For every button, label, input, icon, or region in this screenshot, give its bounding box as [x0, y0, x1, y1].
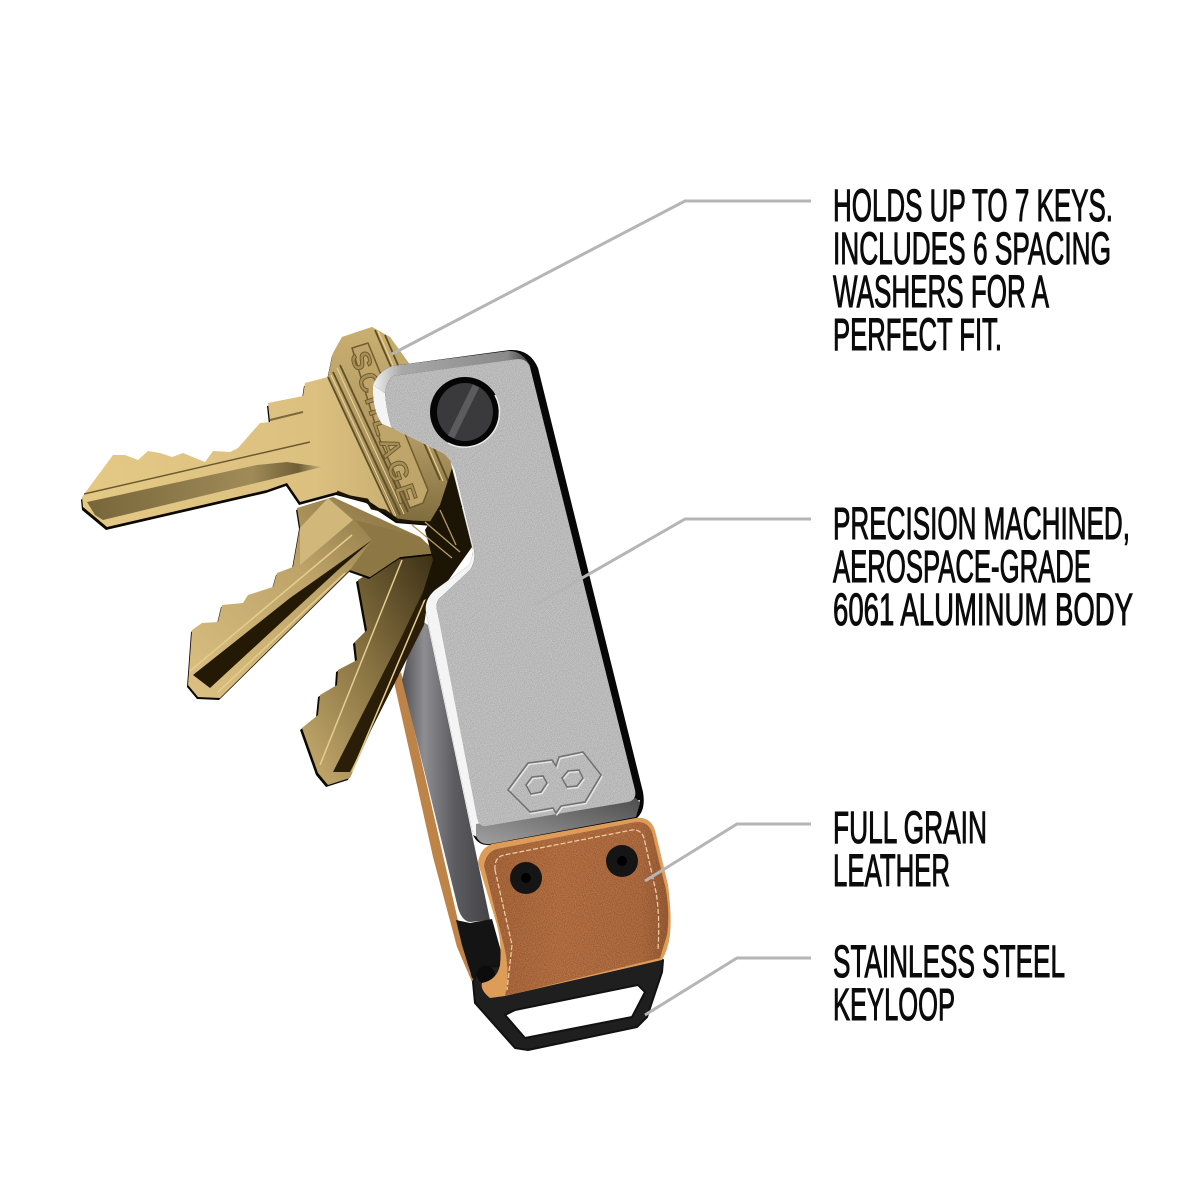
key 3 ridge [320, 560, 431, 772]
leader line: keyloop [645, 958, 811, 1015]
body face [385, 359, 635, 826]
text: holds up to 7 keys: WASHERS FOR A [833, 266, 1049, 317]
key 2 shadow [187, 499, 436, 700]
body black edge [373, 350, 644, 845]
leather stitching [495, 830, 659, 990]
key 2 head shade [350, 520, 437, 577]
key 2 blade [188, 497, 437, 698]
body lower bevel [476, 798, 640, 844]
key 1 blade and head [82, 327, 470, 527]
key 1 groove [87, 462, 322, 520]
text: holds up to 7 keys [833, 180, 1113, 360]
body bevel top [373, 351, 531, 393]
key 1 [81, 327, 472, 602]
key 1 head band [328, 327, 470, 523]
back plate [402, 617, 490, 922]
screw head [437, 383, 493, 441]
key 3 groove [333, 573, 432, 772]
text: full grain leather: FULL GRAIN [833, 802, 987, 853]
text: holds up to 7 keys: PERFECT FIT. [833, 309, 1002, 360]
rivet right [606, 845, 638, 877]
key 1 ridge line [84, 442, 310, 494]
key 3 [300, 553, 450, 787]
key 2 groove [193, 540, 372, 688]
logo shadow lines [509, 754, 602, 814]
loop ring [477, 966, 495, 984]
key 3 blade [302, 553, 450, 785]
logo right hex [562, 770, 583, 787]
text: full grain leather: LEATHER [833, 845, 950, 896]
leather tab [478, 818, 671, 998]
text: aluminum body [833, 498, 1133, 635]
inner key ridges [412, 510, 460, 558]
stainless steel keyloop [473, 960, 663, 1050]
logo left hex [526, 776, 547, 794]
screw highlight [448, 395, 499, 447]
key 3 shadow [300, 555, 448, 787]
key 2 shoulder [300, 498, 353, 565]
key head ridges [328, 330, 452, 517]
loop frame [473, 960, 663, 1050]
key 1 tooth notch [270, 412, 303, 420]
key brand text: SCHLAGE [344, 347, 423, 507]
leader line: keys [392, 201, 811, 354]
body bevel left [373, 385, 640, 843]
aluminum body [373, 350, 644, 845]
text: stainless steel keyloop: KEYLOOP [833, 979, 955, 1030]
key head plate [352, 343, 428, 508]
key 2 ridge [190, 535, 352, 692]
product: key organizer [81, 327, 671, 1050]
leather face [484, 822, 668, 996]
key edge wave [337, 492, 433, 523]
leather edge [478, 818, 671, 998]
leader line: body [535, 519, 811, 605]
callouts text [833, 180, 1133, 1030]
screw slot [451, 386, 476, 437]
key 1 shadow [81, 330, 469, 530]
leather back strap [394, 672, 486, 992]
logo [508, 752, 602, 814]
key 2 [187, 497, 437, 700]
screw [430, 377, 500, 447]
strap black lining [456, 919, 504, 985]
text: stainless steel keyloop [833, 936, 1065, 1030]
leader line: leather [645, 824, 811, 881]
screw recess [430, 377, 500, 447]
key head highlights [331, 331, 443, 516]
rivet left [510, 862, 542, 894]
logo outline [508, 752, 601, 813]
text: full grain leather [833, 802, 987, 896]
key head shadow under body [420, 468, 472, 602]
